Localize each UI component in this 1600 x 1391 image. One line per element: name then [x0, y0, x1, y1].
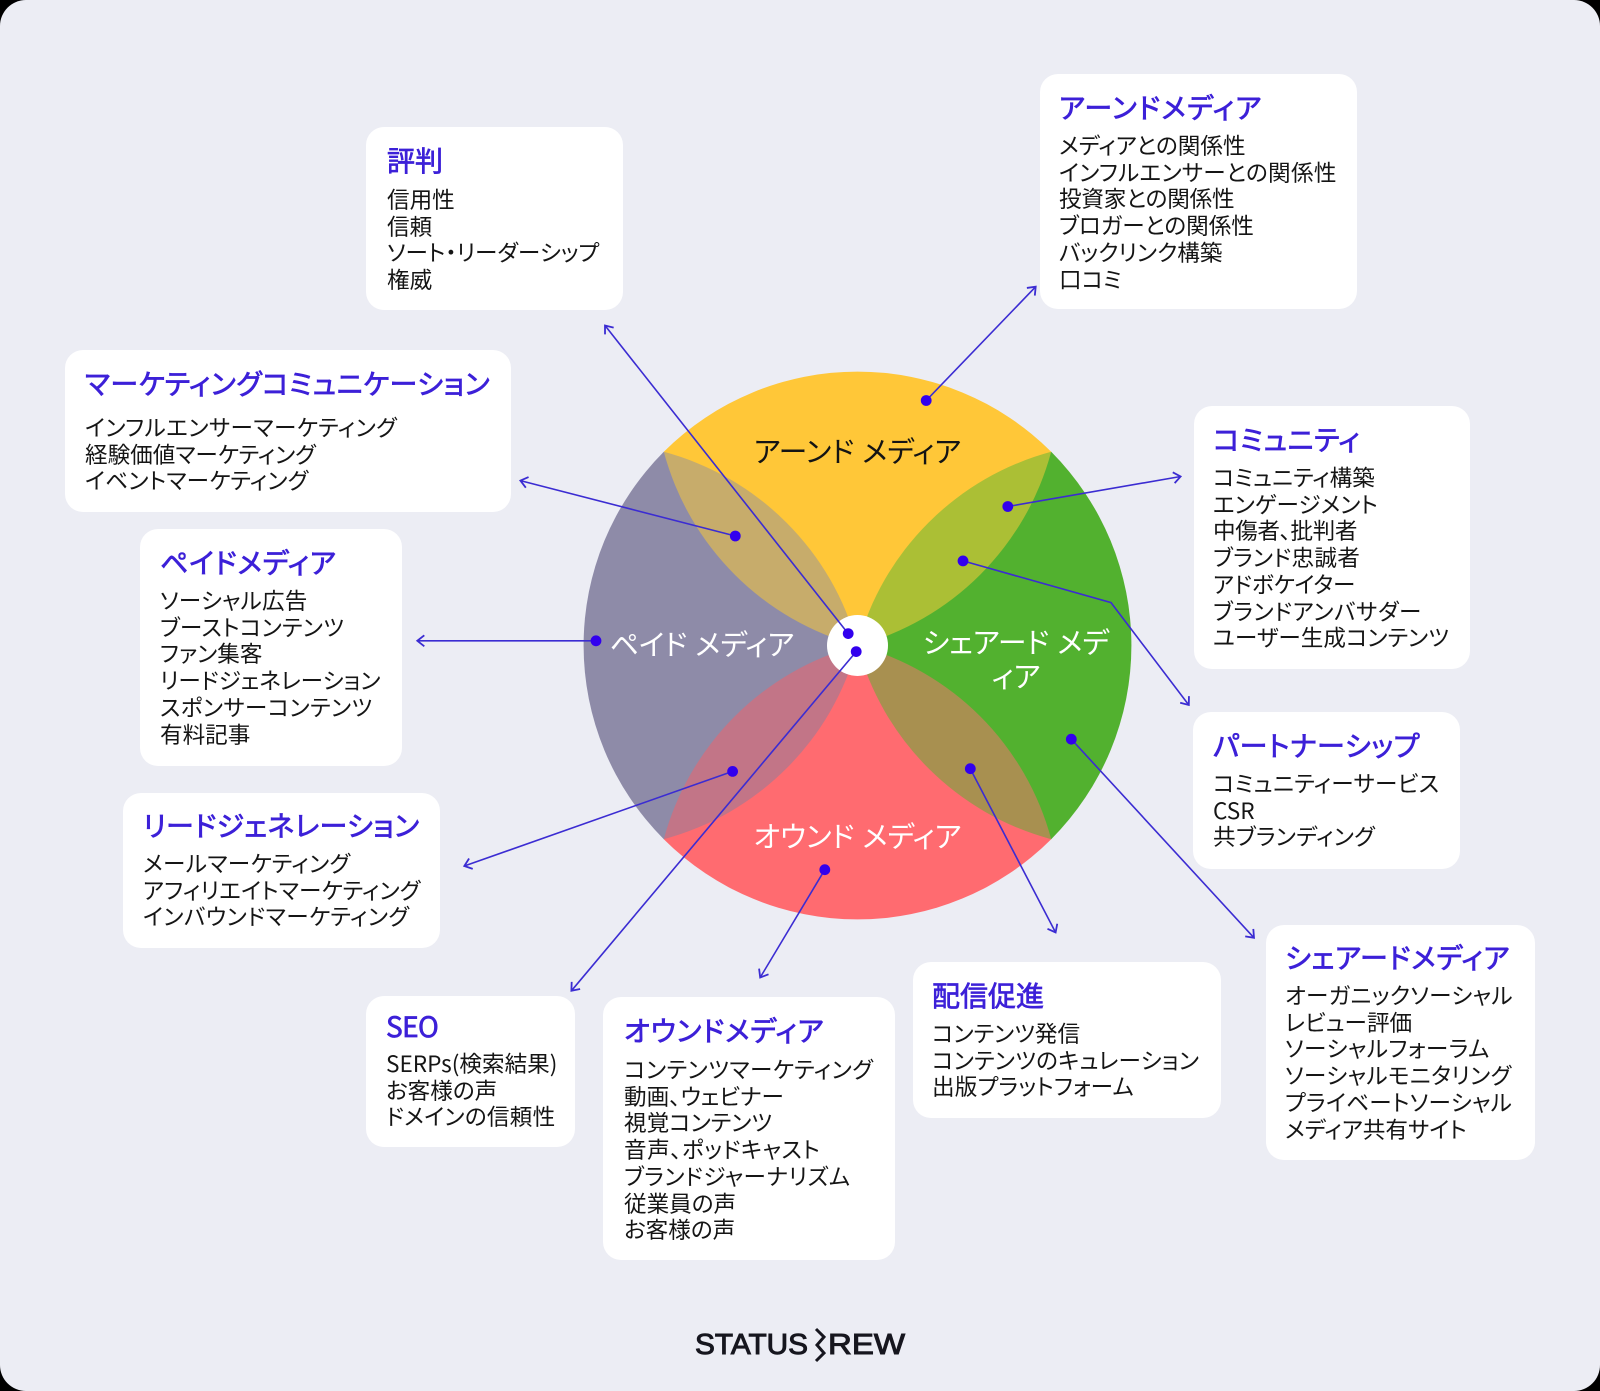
list: コミュニティ items: エンゲージメント — [1213, 493, 1378, 518]
segment: オウンド メディア — [664, 646, 1051, 919]
list: パートナーシップ items: CSR — [1213, 793, 1255, 826]
heading: リードジェネレーション: リードジェネレーション — [143, 811, 419, 842]
list: 評判 items: 信用性 — [387, 188, 455, 213]
media wheel — [584, 372, 1131, 919]
list: アーンドメディア items: インフルエンサーとの関係性 — [1059, 161, 1337, 186]
list: コミュニティ items: ブランドアンバサダー — [1213, 600, 1422, 625]
list: アーンドメディア items: 口コミ — [1059, 268, 1122, 293]
list: コミュニティ items: コミュニティ構築 — [1213, 466, 1375, 491]
segment: ペイド メディア — [584, 452, 858, 839]
arrow: アーンドメディア — [921, 287, 1036, 406]
label: シェアード メディア: シェアード メデ — [923, 628, 1110, 660]
list: リードジェネレーション items: メールマーケティング — [143, 852, 350, 877]
list: パートナーシップ items: コミュニティーサービス — [1213, 772, 1439, 797]
list: 評判 items: 権威 — [387, 268, 432, 293]
list: シェアードメディア items: レビュー評価 — [1285, 1011, 1412, 1036]
list: コミュニティ items: ユーザー生成コンテンツ — [1213, 626, 1449, 651]
list: ペイドメディア items: ソーシャル広告 — [160, 589, 308, 614]
centre hole — [827, 615, 888, 676]
segment: アーンド メディア — [664, 372, 1051, 646]
arrow: SEO — [571, 646, 862, 991]
list: シェアードメディア items: ソーシャルモニタリング — [1285, 1064, 1512, 1089]
list: リードジェネレーション items: インバウンドマーケティング — [143, 905, 409, 930]
list: オウンドメディア items: 従業員の声 — [624, 1192, 736, 1217]
arrow: オウンドメディア — [760, 864, 830, 978]
list: アーンドメディア items: バックリンク構築 — [1059, 241, 1222, 266]
overlap: earned and shared — [858, 452, 1051, 646]
heading: シェアードメディア: シェアードメディア — [1285, 943, 1510, 974]
list: SEO items: お客様の声 — [386, 1073, 497, 1106]
list: SEO items: SERPs(検索結果) — [386, 1046, 557, 1079]
list: コミュニティ items: ブランド忠誠者 — [1213, 546, 1360, 571]
list: ペイドメディア items: ブーストコンテンツ — [160, 616, 344, 641]
card: マーケティングコミュニケーション — [65, 350, 511, 512]
list: パートナーシップ items — [1213, 772, 1439, 850]
label: アーンド メディア: アーンド メディア — [754, 437, 961, 469]
arrow: シェアードメディア — [1066, 734, 1254, 938]
list: マーケティングコミュニケーション items — [85, 416, 398, 494]
card: コミュニティ — [1194, 406, 1470, 669]
card: アーンドメディア — [1040, 74, 1357, 309]
list: アーンドメディア items: ブロガーとの関係性 — [1059, 214, 1254, 239]
list: リードジェネレーション items: アフィリエイトマーケティング — [143, 879, 420, 904]
list: オウンドメディア items: 音声、ポッドキャスト — [624, 1138, 820, 1163]
arrow: マーケティングコミュニケーション — [520, 481, 741, 541]
card: シェアードメディア — [1266, 925, 1535, 1160]
list: 配信促進 items: 出版プラットフォーム — [932, 1075, 1134, 1100]
segment: シェアード メディア — [858, 452, 1131, 839]
list: アーンドメディア items: 投資家との関係性 — [1059, 187, 1234, 212]
list: アーンドメディア items — [1059, 134, 1337, 293]
label: オウンド メディア: オウンド メディア — [754, 822, 962, 854]
arrow: リードジェネレーション — [464, 766, 738, 866]
list: オウンドメディア items: 動画、ウェビナー — [624, 1085, 784, 1110]
list: オウンドメディア items: 視覚コンテンツ — [624, 1111, 772, 1136]
arrow: ペイドメディア — [417, 635, 601, 646]
heading: 評判: 評判 — [387, 146, 443, 177]
card: ペイドメディア — [140, 529, 402, 766]
label: ペイド メディア: ペイド メディア — [610, 630, 794, 662]
list: オウンドメディア items: コンテンツマーケティング — [624, 1058, 873, 1083]
list: ペイドメディア items: 有料記事 — [160, 723, 250, 748]
heading: オウンドメディア: オウンドメディア — [624, 1016, 824, 1047]
list: 評判 items — [387, 188, 600, 293]
list: 評判 items: ソート・リーダーシップ — [387, 241, 599, 266]
heading: アーンドメディア: アーンドメディア — [1059, 93, 1263, 124]
list: マーケティングコミュニケーション items: イベントマーケティング — [85, 469, 308, 494]
list: ペイドメディア items — [160, 589, 380, 748]
logo: Statusbrew: STATUS — [695, 1329, 808, 1361]
card: オウンドメディア — [603, 997, 895, 1260]
card: 配信促進 — [913, 962, 1221, 1118]
heading: パートナーシップ: パートナーシップ — [1213, 731, 1420, 762]
heading: コミュニティ: コミュニティ — [1213, 425, 1360, 456]
list: SEO items: ドメインの信頼性 — [386, 1099, 556, 1132]
overlap: owned and paid — [664, 646, 858, 839]
list: ペイドメディア items: スポンサーコンテンツ — [160, 696, 373, 721]
list: リードジェネレーション items — [143, 852, 421, 930]
list: アーンドメディア items: メディアとの関係性 — [1059, 134, 1246, 159]
heading: マーケティングコミュニケーション: マーケティングコミュニケーション — [85, 369, 490, 400]
arrow: パートナーシップ — [958, 556, 1189, 705]
list: ペイドメディア items: リードジェネレーション — [160, 669, 380, 694]
card: 評判 — [366, 127, 623, 310]
list: 配信促進 items: コンテンツ発信 — [932, 1022, 1080, 1047]
heading: SEO: SEO — [386, 1006, 438, 1046]
label: シェアード メディア: ィア — [991, 662, 1041, 694]
list: コミュニティ items — [1213, 466, 1449, 651]
list: オウンドメディア items — [624, 1058, 874, 1243]
list: パートナーシップ items: 共ブランディング — [1213, 825, 1375, 850]
logo: Statusbrew: REW — [828, 1329, 906, 1361]
list: シェアードメディア items: ソーシャルフォーラム — [1285, 1037, 1490, 1062]
logo: Statusbrew — [695, 1329, 906, 1361]
list: オウンドメディア items: ブランドジャーナリズム — [624, 1165, 851, 1190]
overlap: earned and paid — [664, 452, 858, 646]
list: 配信促進 items: コンテンツのキュレーション — [932, 1049, 1199, 1074]
list: シェアードメディア items: メディア共有サイト — [1285, 1118, 1467, 1143]
list: マーケティングコミュニケーション items: 経験価値マーケティング — [85, 443, 316, 468]
list: コミュニティ items: 中傷者、批判者 — [1213, 519, 1357, 544]
list: オウンドメディア items: お客様の声 — [624, 1218, 735, 1243]
list: 評判 items: 信頼 — [387, 215, 432, 240]
list: 配信促進 items — [932, 1022, 1199, 1100]
list: シェアードメディア items: プライベートソーシャル — [1285, 1091, 1512, 1116]
heading: 配信促進: 配信促進 — [932, 981, 1044, 1012]
arrow: 評判 — [605, 326, 854, 639]
list: SEO items — [386, 1046, 557, 1132]
overlap: shared and owned — [858, 646, 1051, 839]
list: シェアードメディア items: オーガニックソーシャル — [1285, 984, 1513, 1009]
list: シェアードメディア items — [1285, 984, 1513, 1143]
card: パートナーシップ — [1193, 712, 1460, 869]
arrow: コミュニティ — [1002, 476, 1181, 512]
card: リードジェネレーション — [123, 793, 440, 948]
arrow: 配信促進 — [965, 763, 1056, 932]
list: ペイドメディア items: ファン集客 — [160, 642, 262, 667]
card: SEO — [366, 996, 575, 1147]
list: コミュニティ items: アドボケイター — [1213, 573, 1355, 598]
list: マーケティングコミュニケーション items: インフルエンサーマーケティング — [85, 416, 397, 441]
heading: ペイドメディア: ペイドメディア — [160, 548, 337, 579]
